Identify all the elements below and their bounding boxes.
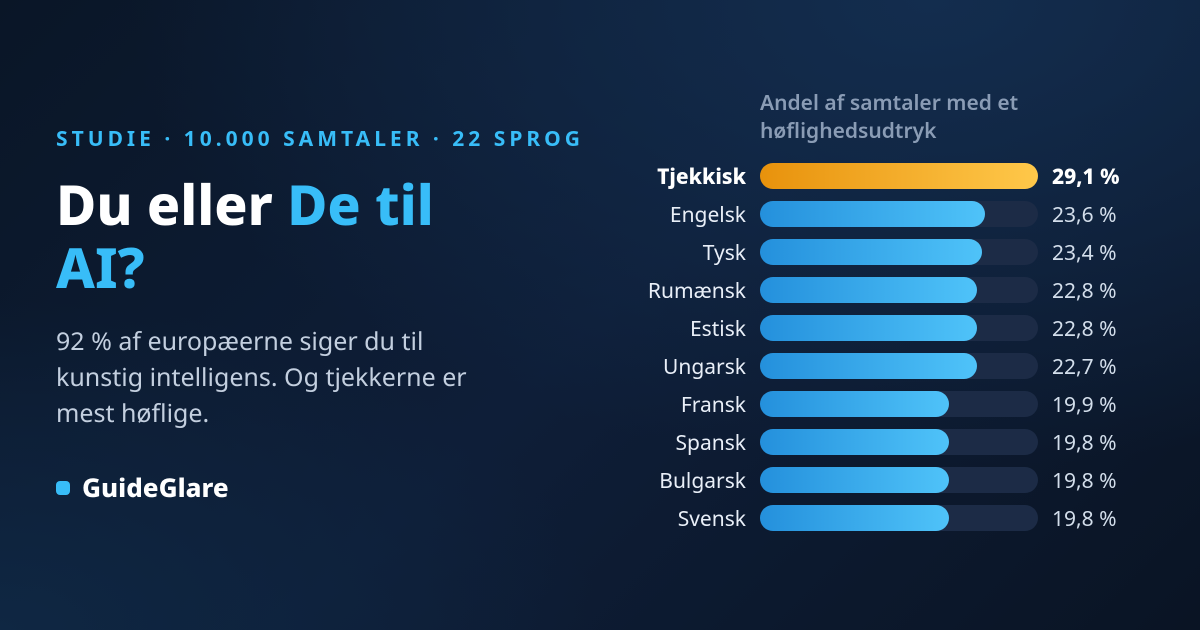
description text: kunstig intelligens. Og tjekkerne er	[56, 360, 467, 394]
bar: Tysk 23,4 %: 23,4 %	[1052, 239, 1117, 267]
bar: Spansk 19,8 %: Spansk	[676, 429, 746, 457]
chart title: høflighedsudtryk	[760, 117, 936, 145]
bar: Fransk 19,9 %: 19,9 %	[1052, 391, 1117, 419]
bar: Spansk 19,8 %	[676, 429, 1117, 457]
bar: Tjekkisk 29,1 %: Tjekkisk	[657, 163, 746, 191]
brand: GuideGlare	[56, 469, 229, 505]
description text	[56, 324, 467, 430]
bar: Svensk 19,8 %: Svensk	[678, 505, 746, 533]
bar: Bulgarsk 19,8 %	[659, 467, 1117, 495]
bar: Engelsk 23,6 %: Engelsk	[670, 201, 746, 229]
icon: brand square	[56, 481, 70, 495]
bar: Estisk 22,8 %: 22,8 %	[1052, 315, 1117, 343]
bar: Estisk 22,8 %: Estisk	[690, 315, 746, 343]
bar: Bulgarsk 19,8 %: Bulgarsk	[659, 467, 746, 495]
bar: Ungarsk 22,7 %	[663, 353, 1117, 381]
bar chart	[648, 163, 1119, 533]
bar: Rumænsk 22,8 %	[648, 277, 1117, 305]
bar: Ungarsk 22,7 %: Ungarsk	[663, 353, 746, 381]
bar: Engelsk 23,6 %: 23,6 %	[1052, 201, 1117, 229]
bar: Svensk 19,8 %: 19,8 %	[1052, 505, 1117, 533]
title: AI?	[56, 230, 145, 305]
bar: Rumænsk 22,8 %: Rumænsk	[648, 277, 746, 305]
bar: Tysk 23,4 %: Tysk	[703, 239, 746, 267]
bar: Fransk 19,9 %: Fransk	[681, 391, 746, 419]
chart title: Andel af samtaler med et	[760, 89, 1018, 117]
chart title	[760, 89, 1018, 145]
bar: Fransk 19,9 %	[681, 391, 1117, 419]
bar: Tjekkisk 29,1 %: 29,1 %	[1052, 163, 1119, 191]
bar: Tysk 23,4 %	[702, 239, 1117, 267]
brand name: GuideGlare	[82, 469, 229, 505]
description text: mest høflige.	[56, 396, 209, 430]
bar: Spansk 19,8 %: 19,8 %	[1052, 429, 1117, 457]
description text: 92 % af europæerne siger du til	[56, 324, 423, 358]
title	[56, 167, 434, 305]
bar: Svensk 19,8 %	[678, 505, 1117, 533]
bar: Rumænsk 22,8 %: 22,8 %	[1052, 277, 1117, 305]
bar: Tjekkisk 29,1 %	[657, 163, 1119, 191]
kicker: STUDIE · 10.000 SAMTALER · 22 SPROG	[56, 125, 584, 153]
title: Du eller De til	[56, 167, 434, 242]
bar: Ungarsk 22,7 %: 22,7 %	[1052, 353, 1117, 381]
bar: Engelsk 23,6 %	[670, 201, 1117, 229]
bar: Estisk 22,8 %	[690, 315, 1117, 343]
bar: Bulgarsk 19,8 %: 19,8 %	[1052, 467, 1117, 495]
